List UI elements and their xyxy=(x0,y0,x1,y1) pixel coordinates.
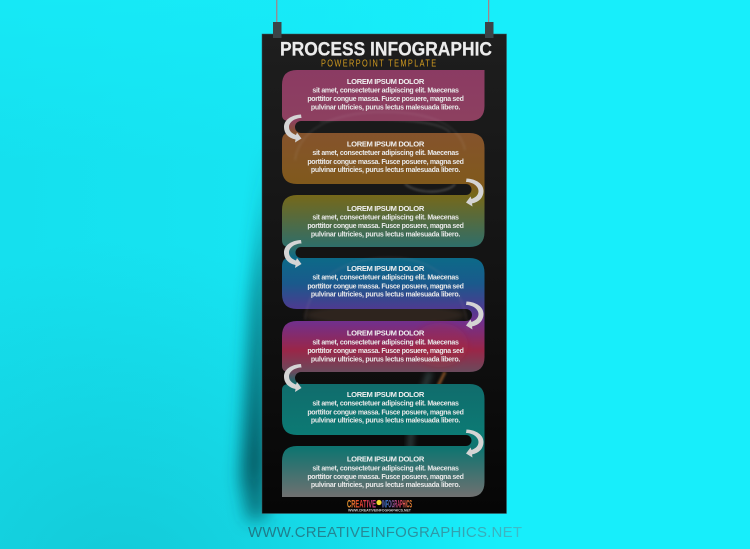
step 2 text: sit amet, consectetuer adipiscing elit. Maecenas xyxy=(312,150,459,157)
step 6 text: sit amet, consectetuer adipiscing elit. Maecenas xyxy=(312,401,459,408)
step 1 text: pulvinar ultricies, purus lectus malesuada libero. xyxy=(311,104,460,112)
step 5 text xyxy=(307,328,464,363)
step 1 text: porttitor congue massa. Fusce posuere, magna sed xyxy=(307,96,464,103)
step 2 text xyxy=(307,140,464,174)
step 3 text: LOREM IPSUM DOLOR xyxy=(347,204,425,213)
step 5 text: pulvinar ultricies, purus lectus malesuada libero. xyxy=(311,356,460,363)
smoke decoration behind ribbon xyxy=(305,119,465,470)
step 2 text: pulvinar ultricies, purus lectus malesuada libero. xyxy=(311,167,460,174)
step 2 text: porttitor congue massa. Fusce posuere, magna sed xyxy=(307,159,464,166)
step 3 text xyxy=(307,204,464,238)
step 1 text: sit amet, consectetuer adipiscing elit. Maecenas xyxy=(312,88,459,94)
arrow: step 6 to 7 xyxy=(466,430,484,458)
step 6 text xyxy=(307,390,464,425)
step 1 text xyxy=(307,77,464,112)
footer logo: CREATIVE xyxy=(347,498,376,510)
step 6 text: pulvinar ultricies, purus lectus malesuada libero. xyxy=(311,418,460,425)
arrow: step 3 to 4 xyxy=(284,240,302,268)
step 3 text: pulvinar ultricies, purus lectus malesuada libero. xyxy=(311,232,460,238)
arrow: step 2 to 3 xyxy=(466,178,484,206)
process ribbon xyxy=(282,70,484,497)
subtitle: POWERPOINT TEMPLATE xyxy=(321,57,436,69)
step 6 text: LOREM IPSUM DOLOR xyxy=(347,390,425,399)
step 2 text: LOREM IPSUM DOLOR xyxy=(347,140,425,148)
arrow: step 1 to 2 xyxy=(284,114,302,142)
footer logo: WWW.CREATIVEINFOGRAPHICS.NET xyxy=(348,509,412,513)
smoke overlay xyxy=(295,112,468,367)
arrow: step 5 to 6 xyxy=(284,364,302,392)
poster shadow xyxy=(240,135,268,522)
step 4 text xyxy=(307,264,464,299)
step 7 text xyxy=(307,454,464,489)
step 4 text: pulvinar ultricies, purus lectus malesuada libero. xyxy=(311,292,460,299)
step 5 text: LOREM IPSUM DOLOR xyxy=(347,328,425,338)
step 4 text: sit amet, consectetuer adipiscing elit. Maecenas xyxy=(312,275,459,282)
clip: left hanger xyxy=(273,0,282,38)
step 7 text: porttitor congue massa. Fusce posuere, magna sed xyxy=(307,474,464,481)
step 4 text: LOREM IPSUM DOLOR xyxy=(347,264,425,273)
step 5 text: sit amet, consectetuer adipiscing elit. Maecenas xyxy=(312,339,459,346)
step 3 text: porttitor congue massa. Fusce posuere, magna sed xyxy=(307,223,464,230)
step 5 text: porttitor congue massa. Fusce posuere, magna sed xyxy=(307,348,464,355)
step 6 text: porttitor congue massa. Fusce posuere, magna sed xyxy=(307,409,464,416)
text: INFOGRAPHICS xyxy=(382,498,412,510)
panel: poster xyxy=(262,34,506,514)
step 3 text: sit amet, consectetuer adipiscing elit. Maecenas xyxy=(312,214,459,222)
arrow: step 4 to 5 xyxy=(466,302,484,330)
step 7 text: pulvinar ultricies, purus lectus malesuada libero. xyxy=(311,482,460,489)
title: PROCESS INFOGRAPHIC xyxy=(280,38,492,60)
clip: right hanger xyxy=(485,0,494,38)
step 1 text: LOREM IPSUM DOLOR xyxy=(347,77,425,86)
step 4 text: porttitor congue massa. Fusce posuere, magna sed xyxy=(307,283,464,290)
website url: WWW.CREATIVEINFOGRAPHICS.NET xyxy=(248,524,522,541)
step 7 text: LOREM IPSUM DOLOR xyxy=(347,454,425,464)
step 7 text: sit amet, consectetuer adipiscing elit. Maecenas xyxy=(312,465,459,472)
